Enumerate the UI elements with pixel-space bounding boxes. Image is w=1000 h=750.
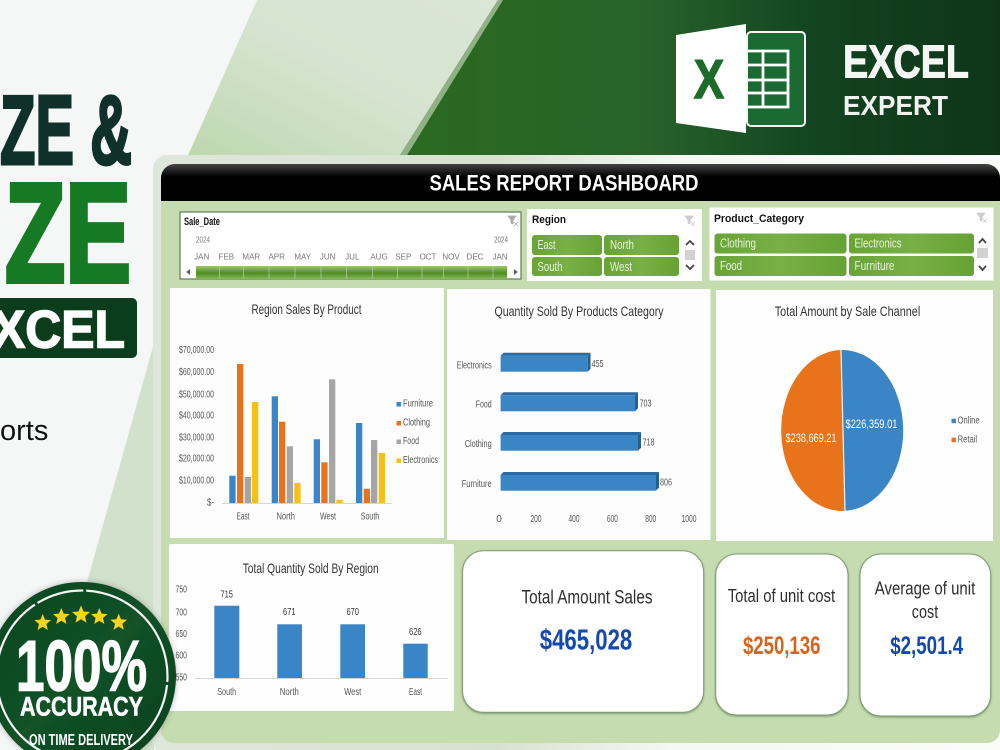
y axis labels: $20,000.00 <box>179 454 214 464</box>
badge text: accuracy: ACCURACY <box>20 692 143 722</box>
y axis labels <box>176 584 187 684</box>
background: dark green header area <box>397 0 1000 160</box>
y axis labels: $50,000.00 <box>179 390 214 400</box>
legend: Retail <box>958 434 977 446</box>
slicer: product category: Food <box>720 259 742 273</box>
x axis labels: 600 <box>607 514 618 525</box>
y axis labels: 700 <box>176 608 187 618</box>
icon: excel logo: X <box>694 48 724 110</box>
value labels: 806 <box>660 478 672 488</box>
y axis labels: $30,000.00 <box>179 432 214 444</box>
legend: Electronics <box>403 455 438 466</box>
kpi card: average of unit cost <box>860 554 991 716</box>
x axis labels: West <box>344 687 361 698</box>
category labels: Electronics <box>457 360 492 372</box>
value labels: 626 <box>409 627 422 638</box>
category labels: Clothing <box>465 439 492 450</box>
logo text: excel expert <box>843 36 969 121</box>
slicer: product category: Furniture <box>854 259 895 273</box>
column bars <box>195 606 448 678</box>
slicer: region: East <box>538 238 556 252</box>
y axis labels: 600 <box>176 650 187 662</box>
chart panel: total amount by sale channel <box>716 290 993 541</box>
slicer: product category <box>710 208 994 280</box>
value labels: 671 <box>283 607 296 618</box>
legend <box>952 416 980 446</box>
badge text: on time delivery: ON TIME DELIVERY <box>29 732 133 749</box>
x axis labels <box>217 687 422 698</box>
y axis labels: 750 <box>176 584 187 596</box>
value labels: 718 <box>642 438 655 448</box>
value labels <box>592 359 672 488</box>
slicer: sale date timeline: MAR <box>242 252 260 262</box>
dashboard title bar: SALES REPORT DASHBOARD <box>430 170 698 196</box>
slicer: region: West <box>610 260 632 274</box>
x axis labels: East <box>409 687 422 698</box>
chart panel: total amount by sale channel: Total Amount by Sale Channel <box>775 303 920 319</box>
slicer: sale date timeline <box>180 212 521 279</box>
category labels <box>457 360 492 490</box>
slicer: sale date timeline: NOV <box>442 252 460 262</box>
x axis labels: South <box>361 512 379 522</box>
chart panel: total quantity sold by region <box>169 544 454 711</box>
x axis labels <box>236 512 379 522</box>
legend: Clothing <box>403 418 430 428</box>
badge: 100% accuracy <box>0 582 176 750</box>
slicer: sale date timeline: DEC <box>467 252 484 262</box>
chart panel: region sales by product: Region Sales By Product <box>252 301 362 317</box>
slicer: sale date timeline: SEP <box>395 252 411 262</box>
x axis labels: North <box>280 687 299 698</box>
slicer: region: North <box>610 238 634 252</box>
background: light green diagonal band <box>186 0 500 160</box>
kpi card: total of unit cost: Total of unit cost <box>728 586 835 606</box>
badge headline: 100%: 100% <box>16 628 147 706</box>
x axis labels: 0 <box>496 514 502 525</box>
legend: Online <box>958 416 980 426</box>
kpi card: total amount sales: $465,028 <box>540 625 632 657</box>
chart panel: quantity sold by products category: Quantity Sold By Products Category <box>494 303 664 319</box>
x axis labels <box>496 514 697 525</box>
x axis labels: 200 <box>530 514 542 525</box>
slicer: sale date timeline: Sale_Date <box>184 216 220 228</box>
x axis labels: 800 <box>645 514 656 525</box>
pie chart: $226,359.01 <box>846 417 898 431</box>
slicer: sale date timeline: 2024 <box>494 236 508 244</box>
slicer: product category: Electronics <box>854 236 902 250</box>
legend <box>396 398 438 466</box>
slicer: sale date timeline: JUN <box>320 252 336 262</box>
dashboard title bar <box>161 164 1000 201</box>
value labels <box>220 590 422 638</box>
y axis labels: 650 <box>176 629 187 640</box>
slicer: sale date timeline: JAN <box>492 252 508 262</box>
y axis labels: $70,000.00 <box>179 345 214 356</box>
chart panel: quantity sold by products category <box>447 289 710 540</box>
3d horizontal bars <box>501 353 659 491</box>
dashboard panel <box>153 155 1000 750</box>
headline: analyze line: ZE & <box>0 75 132 185</box>
x axis labels: East <box>236 512 250 522</box>
category labels: Furniture <box>462 479 492 490</box>
subheading fragment: orts <box>0 415 48 447</box>
kpi card: average of unit cost: Average of unit <box>875 579 975 599</box>
kpi card: total amount sales <box>463 551 704 712</box>
slicer: region: Region <box>532 214 566 226</box>
kpi card: total amount sales: Total Amount Sales <box>522 588 652 608</box>
logo text: excel expert: EXPERT <box>843 90 948 121</box>
value labels: 455 <box>592 359 604 370</box>
slicer: sale date timeline: APR <box>268 252 285 262</box>
value labels: 703 <box>640 398 652 410</box>
x axis labels: West <box>320 512 336 522</box>
slicer: sale date timeline: OCT <box>420 252 437 262</box>
x axis labels: 1000 <box>682 514 697 525</box>
legend: Furniture <box>403 398 433 410</box>
pie chart: $238,669.21 <box>786 431 837 445</box>
x axis labels: North <box>276 512 295 522</box>
slicer: sale date timeline: FEB <box>219 252 234 262</box>
kpi card: total of unit cost: $250,136 <box>743 632 820 660</box>
slicer: region <box>527 209 702 281</box>
value labels: 715 <box>220 590 233 600</box>
kpi card: average of unit cost: $2,501.4 <box>890 632 963 660</box>
y axis labels: $40,000.00 <box>179 410 214 422</box>
chart panel: region sales by product <box>170 288 444 538</box>
y axis labels: 550 <box>176 672 187 684</box>
slicer: product category: Product_Category <box>714 213 805 225</box>
category labels: Food <box>476 400 492 410</box>
clustered bars <box>222 364 392 504</box>
x axis labels: 400 <box>568 514 580 525</box>
y axis labels: $- <box>207 498 214 508</box>
logo text: excel expert: EXCEL <box>843 36 969 88</box>
slicer: sale date timeline: 2024 <box>196 236 210 244</box>
kpi card: total of unit cost <box>716 554 848 715</box>
y axis labels <box>179 345 214 508</box>
slicer: sale date timeline: JAN <box>194 252 209 262</box>
value labels: 670 <box>346 607 359 618</box>
legend: Food <box>403 436 419 447</box>
slicer: sale date timeline: AUG <box>370 252 388 262</box>
chart panel: total quantity sold by region: Total Quantity Sold By Region <box>243 560 379 576</box>
slicer: product category: Clothing <box>720 236 756 250</box>
icon: five stars <box>34 606 127 630</box>
pie chart <box>781 350 903 511</box>
slicer: region: South <box>538 260 563 274</box>
y axis labels: $60,000.00 <box>179 367 214 378</box>
y axis labels: $10,000.00 <box>179 476 214 486</box>
icon: excel logo <box>676 24 805 133</box>
kpi card: average of unit cost: cost <box>912 602 938 622</box>
x axis labels: South <box>217 687 236 698</box>
slicer: sale date timeline: JUL <box>345 252 360 262</box>
background: lower light green triangle <box>40 343 154 750</box>
headline: visualize line: ZE <box>5 154 131 312</box>
slicer: sale date timeline: MAY <box>294 252 312 262</box>
